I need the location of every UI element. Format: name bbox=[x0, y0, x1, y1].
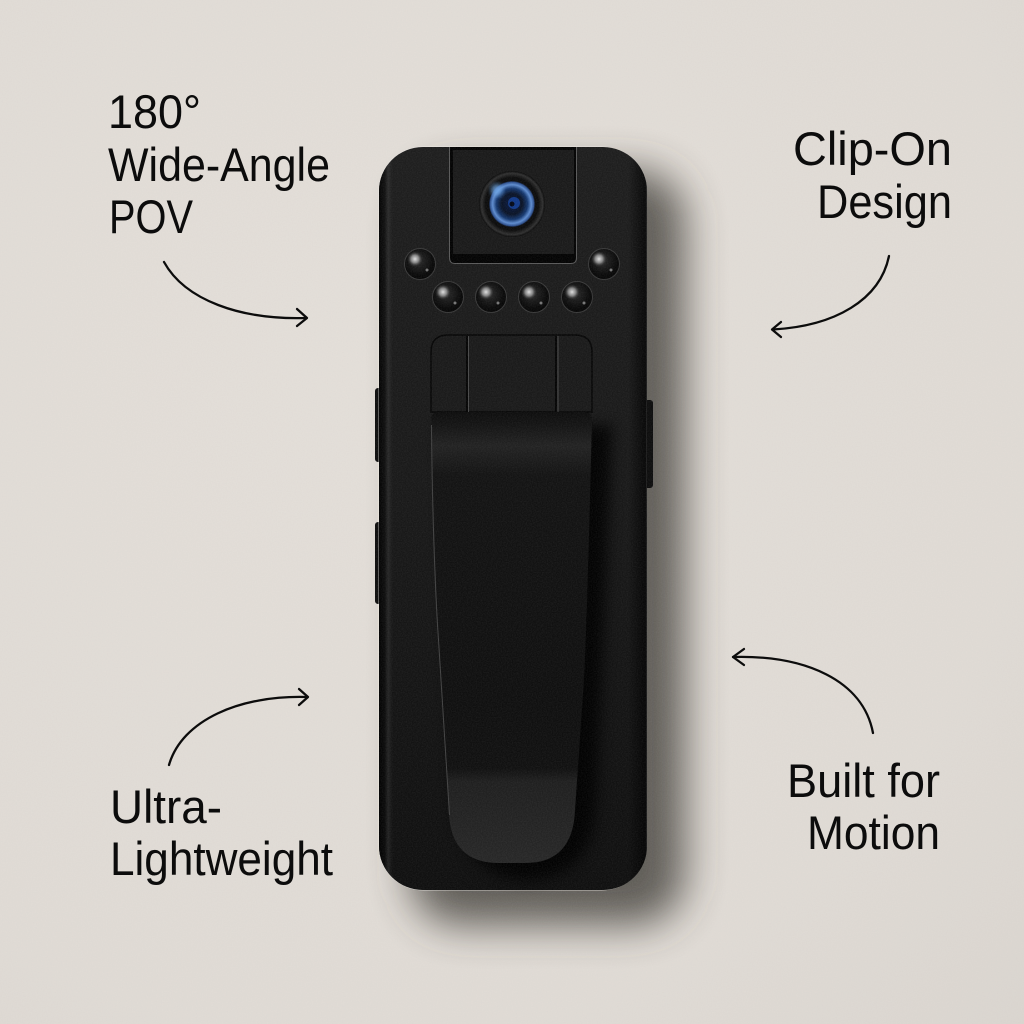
camera body bbox=[379, 147, 647, 890]
LED 6 bbox=[562, 282, 592, 312]
infrared LEDs bbox=[404, 248, 620, 312]
label: 180 wide-angle POV: Wide-Angle bbox=[108, 138, 330, 191]
label: 180 wide-angle POV: 180° bbox=[108, 85, 201, 138]
camera device bbox=[375, 146, 653, 890]
side buttons bbox=[375, 388, 653, 604]
LED 3 bbox=[432, 282, 464, 312]
lens housing bbox=[449, 147, 577, 264]
label: ultra-lightweight: Lightweight bbox=[110, 832, 333, 885]
clip edge highlight bbox=[432, 425, 450, 815]
clip hinge bbox=[431, 335, 592, 412]
LED 2 bbox=[588, 248, 620, 280]
label: ultra-lightweight: Ultra- bbox=[110, 780, 222, 833]
arrow: to clip bbox=[772, 256, 889, 337]
rim light bbox=[378, 146, 646, 890]
label: built for motion bbox=[787, 754, 940, 859]
device shadow bbox=[410, 170, 685, 925]
lens bbox=[479, 171, 545, 237]
arrow: to motion bbox=[733, 649, 873, 733]
label: 180 wide-angle POV bbox=[108, 85, 330, 243]
belt clip bbox=[431, 412, 592, 863]
LED 4 bbox=[476, 282, 506, 312]
arrow: to wide-angle bbox=[164, 262, 307, 326]
label: clip-on design: Design bbox=[817, 175, 952, 228]
label: ultra-lightweight bbox=[110, 780, 333, 885]
label: built for motion: Built for bbox=[787, 754, 940, 807]
label: clip-on design bbox=[793, 122, 952, 228]
label: built for motion: Motion bbox=[807, 806, 940, 859]
arrow: to lightweight bbox=[169, 689, 308, 765]
label: 180 wide-angle POV: POV bbox=[109, 190, 194, 243]
LED 1 bbox=[404, 248, 436, 280]
body edge shading bbox=[379, 147, 647, 890]
LED 5 bbox=[518, 282, 550, 312]
label: clip-on design: Clip-On bbox=[793, 122, 952, 175]
clip shadow bbox=[440, 425, 612, 880]
